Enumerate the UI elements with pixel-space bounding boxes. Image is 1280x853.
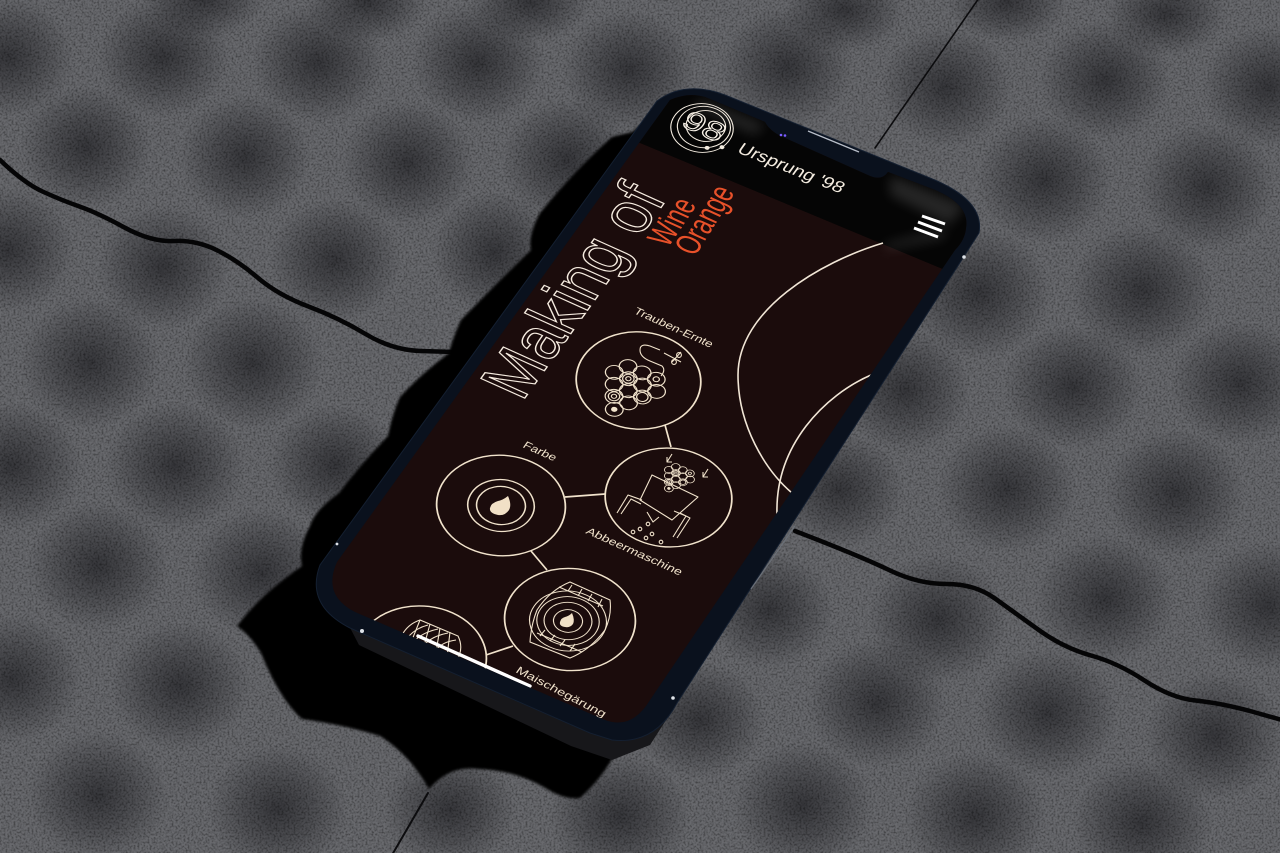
icon: grape cluster — [604, 359, 666, 417]
icon: stem and scissors — [640, 345, 681, 376]
icon: destemming machine — [617, 454, 708, 544]
logo: 98 badge: 98 — [676, 106, 732, 148]
phone side edge — [345, 600, 677, 760]
label: Farbe: Farbe — [520, 439, 559, 464]
connector lines — [486, 425, 671, 655]
circle — [604, 447, 733, 548]
circle — [374, 605, 488, 668]
hamburger menu icon — [914, 216, 945, 237]
icon: drop — [490, 496, 510, 515]
icon: fermentation tank — [528, 581, 611, 659]
metal glints — [336, 255, 966, 700]
step: Farbe — [436, 441, 566, 556]
phone body — [316, 88, 980, 760]
icon: small grape cluster — [664, 463, 695, 492]
icon: drop — [560, 613, 574, 627]
circle — [504, 568, 636, 672]
step: Abbeermaschine — [585, 447, 733, 575]
step: Trauben-Ernte — [575, 307, 712, 430]
label: Abbeermaschine: Abbeermaschine — [583, 525, 685, 578]
circle with concentric rings — [436, 454, 566, 556]
large background arcs — [738, 243, 883, 514]
phone cast shadow — [237, 110, 800, 798]
step: Maischegärung — [504, 568, 636, 718]
speaker grille — [808, 131, 859, 152]
step: barrel (partly off screen) — [374, 605, 488, 668]
volume button highlight — [751, 526, 795, 589]
front camera — [780, 134, 786, 137]
subtitle: Orange: Orange — [667, 180, 743, 260]
header bar — [640, 95, 966, 268]
subtitle: Wine: Wine — [640, 192, 704, 251]
icon: barrel grid — [402, 620, 461, 660]
header reflections — [690, 100, 965, 250]
brand name: Ursprung '98 — [734, 139, 849, 196]
phone front frame — [316, 89, 980, 741]
label: Maischegärung: Maischegärung — [513, 664, 609, 720]
logo: 98 badge — [670, 103, 734, 153]
home indicator — [418, 636, 530, 686]
circle — [575, 331, 702, 430]
screen — [332, 95, 966, 722]
title: Making of: Making of — [465, 173, 681, 408]
label: Trauben-Ernte: Trauben-Ernte — [631, 305, 716, 350]
